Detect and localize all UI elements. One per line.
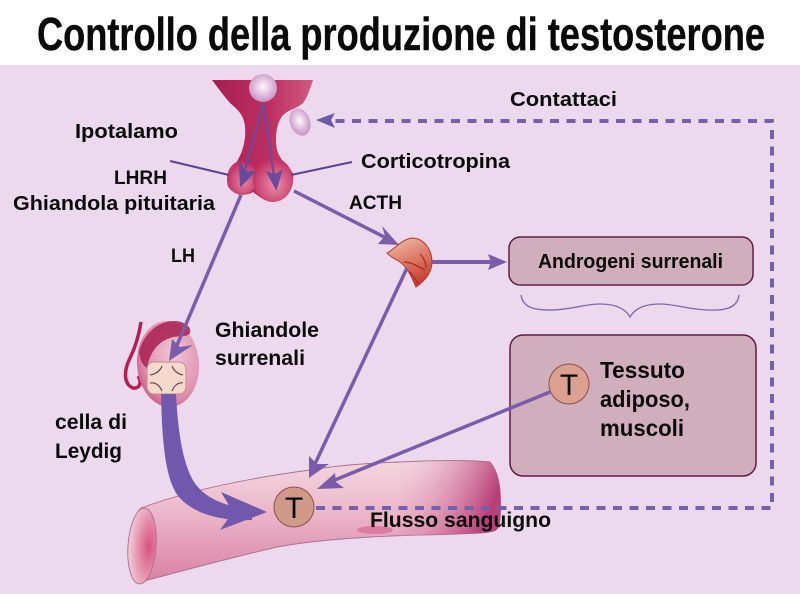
label: ghiandole surrenali: surrenali xyxy=(215,347,305,370)
panel: androgeni surrenali xyxy=(509,237,753,285)
icon: hypothalamus and pituitary xyxy=(212,74,314,202)
label: ipotalamo: Ipotalamo xyxy=(75,121,178,143)
hormone T: blood: T xyxy=(285,492,303,525)
label: androgeni surrenali: Androgeni surrenali xyxy=(538,251,723,273)
icon: testis xyxy=(125,319,202,409)
label: contattaci: Contattaci xyxy=(510,89,617,111)
label: flusso sanguigno: Flusso sanguigno xyxy=(370,509,551,532)
hormone T: tissue: T xyxy=(560,369,578,402)
hormone T: blood xyxy=(274,487,314,527)
arrow: LH xyxy=(169,195,241,361)
arrow: ACTH xyxy=(294,191,399,245)
arrow: T in tissue to T in blood xyxy=(317,392,550,489)
icon: adrenal gland xyxy=(387,238,432,287)
label: cella di leydig: Leydig xyxy=(55,440,122,463)
label: LHRH: LHRH xyxy=(114,168,167,189)
arrow: adrenal to T in blood xyxy=(309,268,407,478)
label: tessuto adiposo muscoli: muscoli xyxy=(600,415,684,441)
label: corticotropina: Corticotropina xyxy=(361,150,511,173)
label: cella di leydig: cella di xyxy=(55,411,127,434)
icon: leydig cell xyxy=(147,362,186,394)
label: LH: LH xyxy=(171,246,195,267)
panel: tessuto adiposo xyxy=(510,335,756,476)
label: ghiandole surrenali: Ghiandole xyxy=(215,319,319,342)
leader lines xyxy=(170,161,352,175)
arrow: adrenal to androgens xyxy=(431,254,507,270)
label: tessuto adiposo muscoli: Tessuto xyxy=(600,357,685,383)
label: tessuto adiposo muscoli: adiposo, xyxy=(600,386,690,412)
brace xyxy=(521,295,739,317)
arrows: hypothalamus to pituitary xyxy=(240,103,281,188)
label: ACTH: ACTH xyxy=(349,193,402,214)
dashed feedback arrow xyxy=(316,113,772,508)
hormone T: tissue xyxy=(549,364,589,404)
blood vessel xyxy=(125,460,501,585)
thick arrow: testosterone to blood xyxy=(161,394,267,530)
label: ghiandola pituitaria: Ghiandola pituitaria xyxy=(13,192,216,215)
